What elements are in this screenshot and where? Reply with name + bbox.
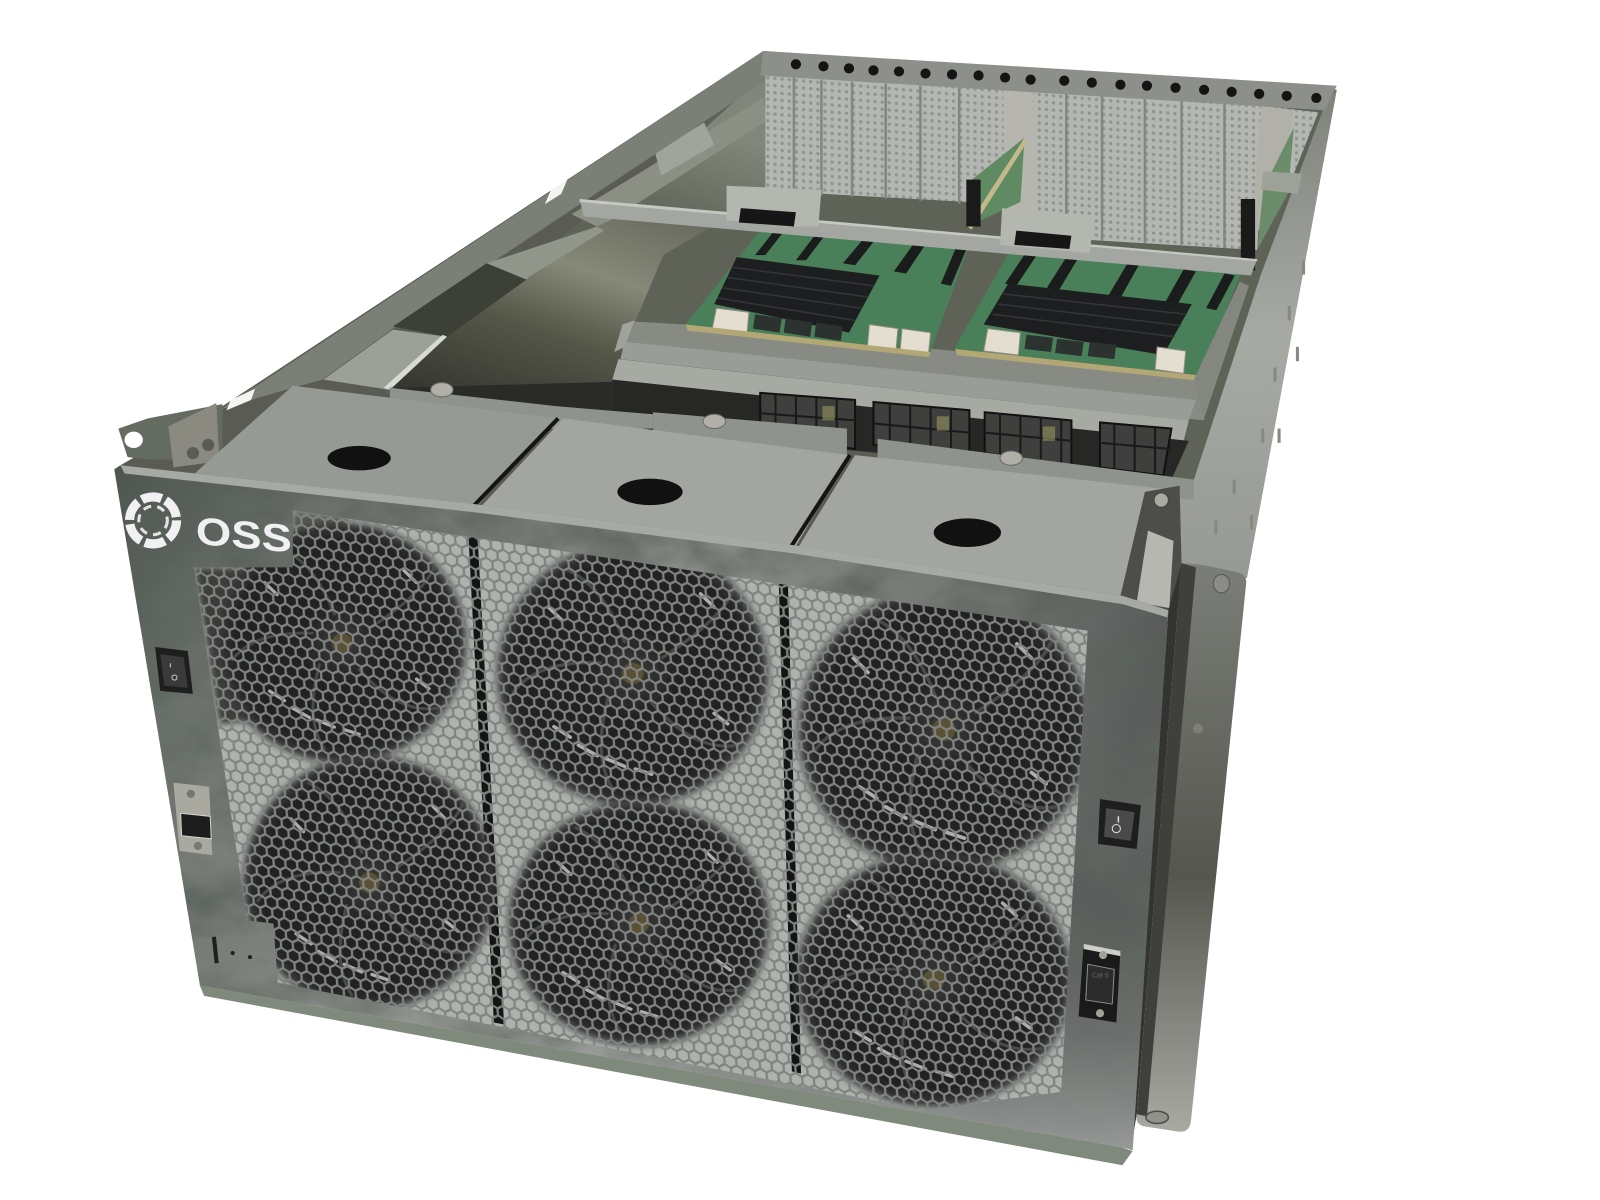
status marks	[212, 937, 252, 963]
logo ring	[130, 497, 177, 544]
front cross bar	[612, 282, 1249, 441]
ethernet port right: Cat 6	[1092, 972, 1109, 980]
tabs behind lids	[390, 388, 1194, 500]
lid hole	[328, 446, 391, 470]
perforated zone backing	[194, 510, 1088, 1110]
front right bracket	[1120, 486, 1182, 612]
illustration: server chassis	[114, 51, 1337, 1166]
fan: left bottom	[243, 755, 496, 1010]
right circuit board	[954, 250, 1241, 381]
lid hole	[617, 479, 683, 505]
lid gaps	[473, 418, 850, 547]
top lid: centre	[478, 418, 849, 553]
rack mounting ear	[1131, 563, 1246, 1151]
divider slits	[468, 535, 504, 1024]
fan: centre bottom	[508, 801, 769, 1046]
power supply bays	[390, 380, 1189, 480]
power switch right	[1098, 799, 1141, 849]
top lid: left	[188, 386, 557, 510]
upper ledge	[487, 227, 604, 280]
rear PCI slot brackets	[765, 73, 1318, 250]
power connectors	[712, 308, 931, 353]
chassis base silhouette	[120, 51, 1337, 612]
upper cross bar with cable brackets	[580, 186, 1257, 276]
interior base	[376, 73, 1324, 480]
ethernet port left	[173, 783, 212, 855]
fan: left top	[217, 522, 466, 763]
left rack ear and block	[118, 403, 222, 467]
ethernet port right	[1079, 944, 1120, 1022]
power switch left	[155, 647, 193, 694]
fan: centre top	[497, 541, 768, 806]
left circuit board	[686, 227, 969, 357]
rear rim with thumbscrews	[760, 51, 1337, 110]
power connectors	[984, 329, 1186, 373]
top lid: right	[796, 455, 1173, 604]
wall cavity	[393, 263, 527, 337]
vertical PCIe cards	[966, 128, 1302, 270]
heat sink	[984, 284, 1192, 355]
fan: right top	[798, 587, 1090, 872]
front panel	[114, 465, 1168, 1165]
steel floor plate	[622, 321, 1204, 420]
lower ledge	[323, 330, 447, 390]
heat sink	[714, 257, 880, 333]
left inner wall	[390, 73, 767, 388]
fan and backing area clipped to the grille	[194, 510, 1090, 1110]
right side panel	[1153, 90, 1337, 578]
thumbscrews	[431, 383, 1022, 465]
fan: right bottom	[796, 852, 1071, 1107]
hexagonal perforated grille	[194, 510, 1088, 1110]
brand logo	[130, 497, 292, 561]
lid hole	[934, 518, 1001, 547]
logo wordmark: OSS	[196, 510, 292, 561]
left chassis rim	[219, 51, 767, 410]
